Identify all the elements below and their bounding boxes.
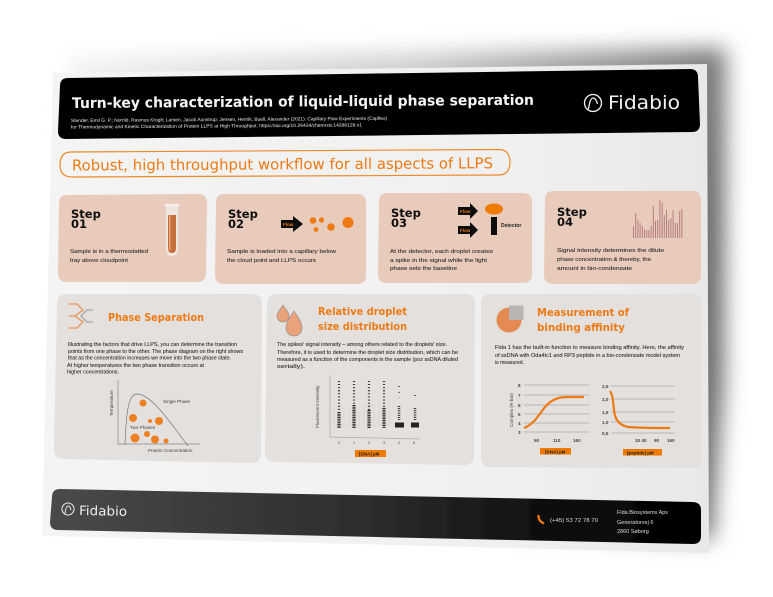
header band: [58, 69, 700, 139]
poster sheet: [42, 64, 709, 553]
chart: phase diagram: Temperature: [109, 390, 114, 416]
workflow heading pill: [60, 150, 510, 177]
body text: Fida 1 has the built-in function to measure binding affinity. Here, the affinity: [495, 345, 684, 351]
chart: peptide binding curve: 90: [654, 438, 660, 443]
logo: Fidabio: Fidabio: [79, 504, 127, 520]
citation: Stender, Emil G. P.; Norrild, Rasmus Krogh; Larsen, Jacob Aunstrup; Jensen, Henrik; Buell, Alexander (2021): Capillary Flow Experiments (Capflex): [71, 116, 387, 123]
heading: [318, 305, 407, 333]
citation: [71, 116, 387, 129]
arrow: flow: Flow: [283, 222, 294, 227]
title: Turn-key characterization of liquid-liquid phase separation: [72, 93, 534, 112]
citation: for Thermodynamic and Kinetic Characterization of Protein LLPS at High Throughput. https://doi.org/10.26434/chemrxiv.14286129.v1: [71, 122, 362, 129]
chart: DNA binding curve: [509, 383, 589, 454]
axis label: [DNA] µM: [359, 452, 380, 456]
icon: droplets: [277, 305, 302, 336]
chart: DNA binding curve: 160: [573, 438, 581, 443]
logo: Fidabio: Fidabio: [608, 92, 680, 114]
chart: peptide binding curve: 0,5: [602, 431, 609, 436]
chart: DNA binding curve: 8: [518, 383, 521, 388]
step text: Sample is loaded into a capillary below: [227, 249, 337, 255]
chart: DNA binding curve: 50: [534, 438, 540, 443]
arrows: flow: Flow: [460, 228, 471, 233]
heading: [537, 306, 629, 334]
phone number: (+45) 53 72 78 70: [550, 518, 598, 524]
step label: 04: [557, 215, 573, 229]
chart: peptide binding curve: 1,5: [602, 410, 609, 415]
chart: DNA binding curve: 4: [518, 421, 521, 426]
icon: detector: [485, 204, 521, 235]
step text: phase concentration & thereby, the: [557, 257, 651, 263]
body text: Illustrating the factors that drive LLPS, you can determine the transition: [68, 342, 237, 348]
step text: Sample is in a thermostatted: [70, 249, 148, 255]
logo: Fidabio: [62, 503, 127, 520]
panel: step 01: [58, 194, 207, 282]
footer band: [50, 489, 701, 544]
step text: tray above cloudpoint: [70, 258, 128, 264]
chart: phase diagram: [109, 380, 200, 453]
chart: signal spikes: [633, 200, 682, 238]
step text: phase sets the baseline: [390, 266, 457, 272]
arrow: flow: [281, 216, 303, 232]
step text: the cloud point and LLPS occurs: [227, 258, 316, 264]
chart: peptide binding curve: [602, 384, 675, 456]
step text: [390, 249, 493, 272]
step label: 03: [391, 216, 407, 230]
chart: fluorescence scatter: 1: [353, 441, 355, 445]
chart: DNA binding curve: 6: [518, 403, 521, 408]
chart: fluorescence scatter: [315, 375, 420, 457]
body text: [277, 342, 458, 370]
body text: that as the concentration increases we move into the two phase state.: [68, 356, 231, 362]
icon: detector: Detector: [501, 223, 521, 229]
step label: 02: [228, 217, 244, 231]
body text: measured as a function of the components in the sample (poz ssDNA diluted: [277, 357, 458, 363]
arrows: flow: Flow: [460, 209, 471, 214]
panel: binding affinity: [481, 294, 702, 468]
axis label: [peptide] µM: [627, 450, 654, 456]
step text: amount in bio-condensate: [557, 266, 632, 272]
address: Generatorvej 6: [617, 520, 653, 526]
body text: points from one phase to the other. The phase diagram on the right shows: [68, 349, 243, 355]
chart: fluorescence scatter: 3: [383, 441, 385, 445]
chart: fluorescence scatter: 5: [413, 441, 415, 445]
body text: is measured.: [495, 360, 524, 366]
address: [617, 510, 668, 535]
chart: phase diagram: Two Phases: [130, 425, 156, 430]
icon: phase lines: [69, 304, 93, 328]
heading: Phase Separation: [108, 312, 204, 324]
chart: peptide binding curve: 1,0: [602, 420, 609, 425]
chart: phase diagram: Single Phase: [163, 399, 191, 404]
icon: droplets: [310, 217, 354, 232]
step text: Signal intensity determines the dilute: [557, 248, 664, 254]
body text: Therefore, it is used to determine the droplet size distribution, which can be: [277, 350, 458, 356]
body text: The spikes' signal intensity – among others related to the droplets' size.: [277, 342, 447, 348]
chart: DNA binding curve: Complex (R-bar): [509, 393, 514, 427]
icon: pie: [496, 306, 524, 332]
body text: [67, 342, 243, 376]
step label: Step: [228, 207, 258, 221]
chart: peptide binding curve: 2,0: [602, 397, 609, 402]
icon: phone: [538, 515, 544, 524]
step label: 01: [71, 217, 87, 231]
address: 2860 Søborg: [617, 529, 649, 535]
paper shadow: [70, 48, 726, 540]
chart: DNA binding curve: 3: [518, 430, 521, 435]
heading: binding affinity: [537, 321, 625, 334]
address: Fida Biosystems Aps: [617, 510, 668, 516]
chart: peptide binding curve: 160: [667, 438, 675, 443]
workflow heading pill: Robust, high throughput workflow for all aspects of LLPS: [72, 154, 493, 174]
step label: Step: [391, 206, 421, 220]
body text: of ssDNA with Oda4tc1 and RP3 peptide in a bio-condensate model system: [495, 353, 680, 359]
body text: [495, 345, 684, 366]
panel: phase separation: [54, 294, 262, 463]
step label: Step: [557, 205, 587, 219]
chart: DNA binding curve: 7: [518, 393, 521, 398]
chart: DNA binding curve: 110: [553, 438, 561, 443]
step text: a spike in the signal while the light: [390, 258, 487, 264]
body text: At higher temperatures the two phase transition occurs at: [67, 363, 204, 369]
chart: fluorescence scatter: 2: [368, 441, 370, 445]
step text: [70, 249, 148, 264]
chart: fluorescence scatter: 0: [338, 441, 340, 445]
panel: droplet size distribution: [265, 294, 475, 465]
icon: test tube: [165, 204, 179, 256]
step text: [557, 248, 664, 272]
panel: step 02: [215, 194, 366, 284]
chart: peptide binding curve: 10 40: [635, 438, 647, 443]
chart: phase diagram: Protein Concentration: [148, 448, 193, 453]
chart: fluorescence scatter: Fluorescent Intensity: [315, 385, 320, 428]
heading: Measurement of: [537, 306, 629, 319]
panel: step 03: [378, 193, 532, 283]
heading: size distribution: [318, 320, 407, 333]
arrows: flow: [458, 203, 478, 238]
body text: serially).: [277, 364, 305, 370]
axis label: [DNA] µM: [545, 450, 566, 454]
chart: fluorescence scatter: 4: [398, 441, 400, 445]
body text: higher concentrations.: [67, 370, 119, 376]
heading: Relative droplet: [318, 305, 407, 318]
panel: step 04: [544, 191, 701, 284]
chart: DNA binding curve: 5: [518, 412, 521, 417]
step text: [227, 249, 337, 264]
step label: Step: [71, 207, 101, 221]
chart: peptide binding curve: 2,5: [602, 384, 609, 389]
step text: At the detector, each droplet creates: [390, 249, 493, 255]
